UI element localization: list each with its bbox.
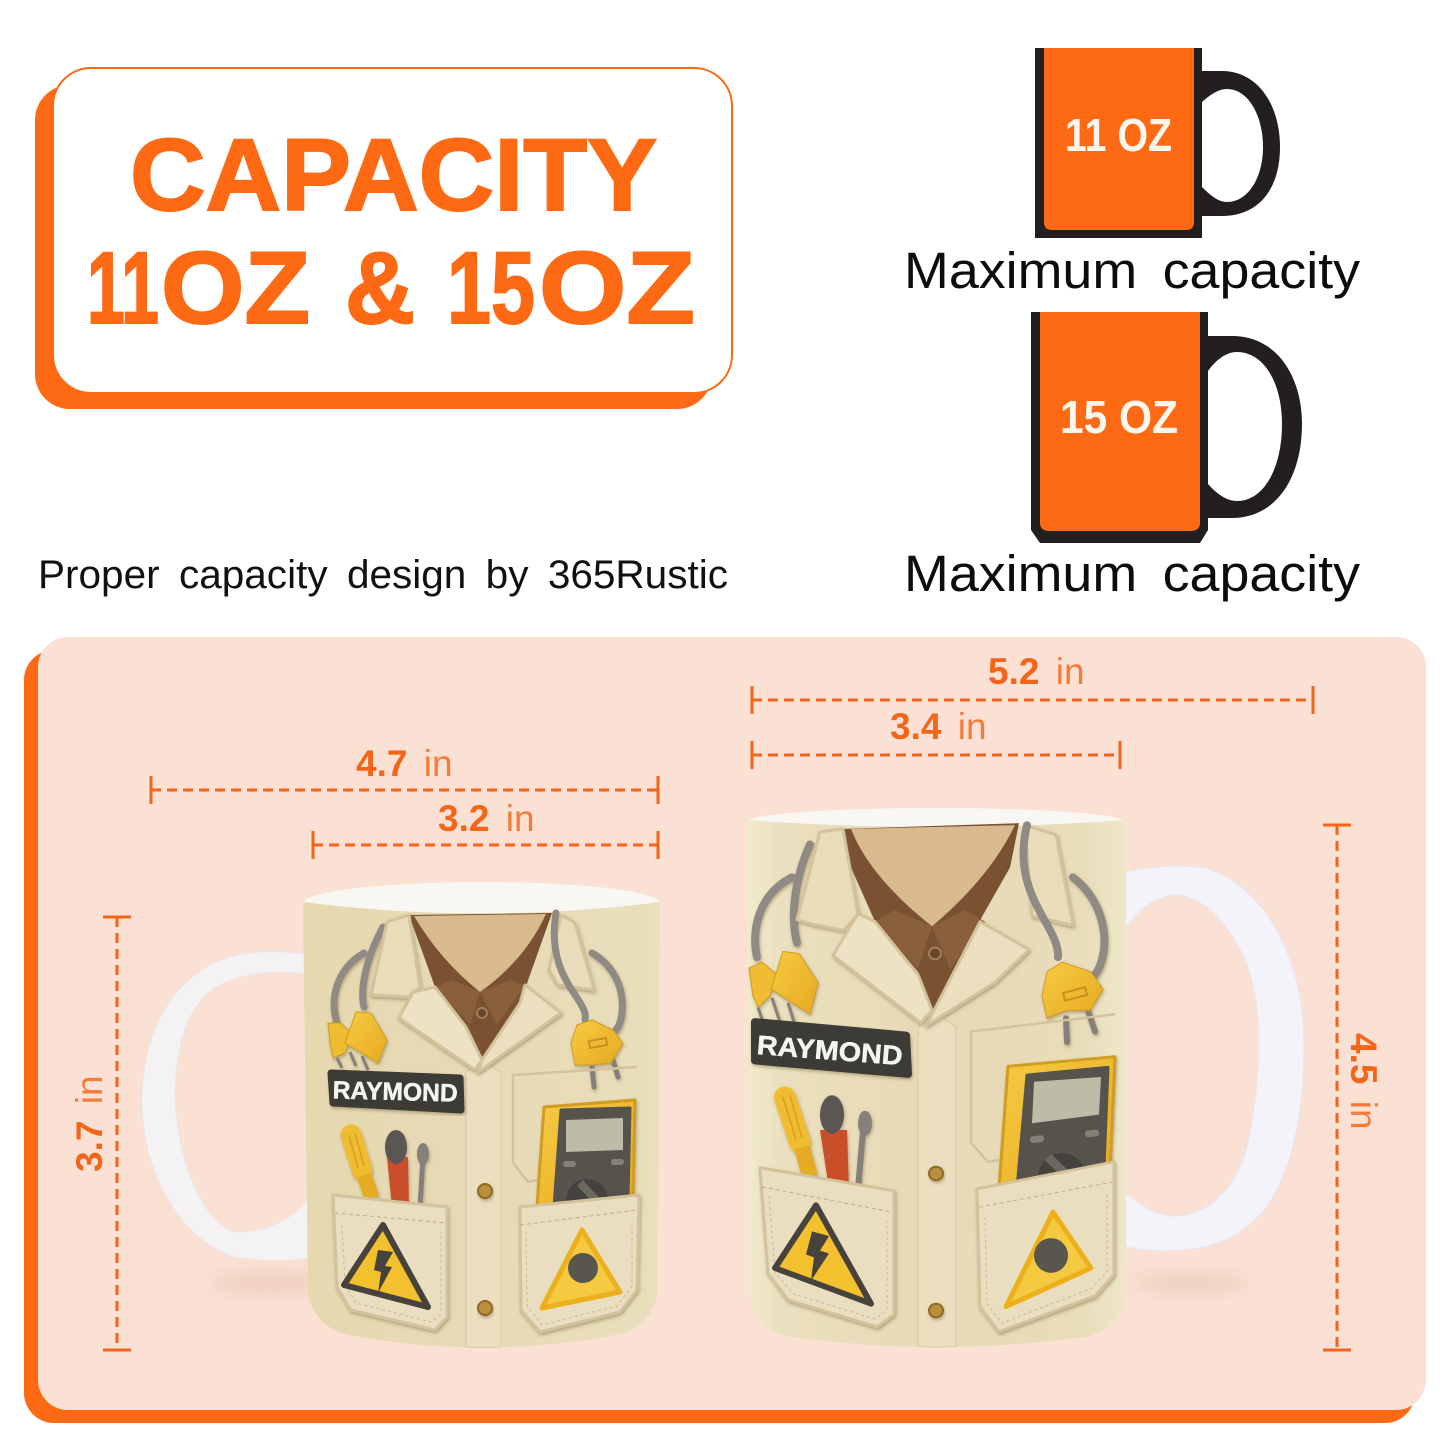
front cable xyxy=(1023,825,1058,957)
right pocket xyxy=(977,1162,1114,1332)
title line 1: CAPACITY xyxy=(130,118,657,232)
icon: 11 oz mug xyxy=(1035,48,1280,238)
dimension: 3.7 in: 3.7 in xyxy=(69,1075,110,1172)
card panel xyxy=(53,68,732,393)
body xyxy=(303,902,660,1348)
polo collar xyxy=(875,910,985,969)
dimension: 3.4 in: 3.4 in xyxy=(890,706,987,747)
collar button xyxy=(929,948,941,959)
placket xyxy=(918,1012,956,1347)
dimension: 3.2 in: 3.2 in xyxy=(438,798,535,839)
multimeter xyxy=(999,1057,1115,1200)
title line 2: & xyxy=(345,231,415,345)
label: maximum capacity 11 oz: Maximum capacity xyxy=(904,242,1361,299)
handle xyxy=(142,952,312,1261)
dimension: 5.2 in xyxy=(752,651,1313,714)
multimeter xyxy=(537,1100,635,1221)
title line 2: 15 xyxy=(447,231,535,345)
back cables xyxy=(334,927,622,1030)
yellow triangle xyxy=(1006,1212,1091,1307)
label 11 oz: 11 OZ xyxy=(1065,109,1172,161)
shadow xyxy=(210,1274,330,1292)
title line 2: OZ xyxy=(539,231,695,345)
name tag: RAYMOND xyxy=(756,1030,904,1071)
mug: 11 oz photo xyxy=(142,882,660,1348)
panel background xyxy=(38,637,1426,1410)
title card xyxy=(35,68,732,409)
left collar xyxy=(797,829,858,930)
polo collar xyxy=(435,980,525,1025)
dimension: 4.5 in: 4.5 in xyxy=(1343,1033,1384,1130)
neck xyxy=(414,914,546,992)
shirt xyxy=(409,913,552,1062)
tools xyxy=(783,1095,872,1189)
warning sign xyxy=(775,1205,871,1304)
right lapel xyxy=(478,985,561,1072)
bolt xyxy=(806,1231,829,1281)
handle xyxy=(1121,866,1304,1251)
left lapel xyxy=(833,914,932,1023)
left collar xyxy=(371,915,420,997)
placket xyxy=(466,1062,501,1348)
dial xyxy=(568,1253,598,1283)
yellow triangle xyxy=(542,1230,620,1308)
label 15 oz: 15 OZ xyxy=(1060,391,1178,443)
dimension: 3.2 in xyxy=(313,798,658,859)
right lapel xyxy=(926,922,1029,1026)
title line 2 xyxy=(87,231,695,345)
warning sign xyxy=(344,1225,428,1307)
icon: 15 oz mug xyxy=(1031,312,1302,543)
dial xyxy=(1034,1238,1068,1273)
dimension: 3.7 in xyxy=(69,917,131,1350)
title line 2: 11 xyxy=(87,231,159,345)
title line 2: OZ xyxy=(161,231,310,345)
rim xyxy=(747,808,1125,836)
body xyxy=(747,820,1126,1347)
dimension: 4.7 in: 4.7 in xyxy=(356,743,453,784)
collar button xyxy=(477,1008,487,1018)
dimension: 3.4 in xyxy=(752,706,1120,769)
label: maximum capacity 15 oz: Maximum capacity xyxy=(904,545,1361,602)
right plug xyxy=(1042,962,1103,1042)
dimension: 4.7 in xyxy=(151,743,658,804)
left plugs xyxy=(328,1012,387,1070)
mug: 15 oz photo xyxy=(747,808,1304,1347)
left plugs xyxy=(749,952,818,1025)
left lapel xyxy=(399,987,482,1070)
tools xyxy=(349,1130,429,1207)
front cable xyxy=(554,913,585,1020)
rim xyxy=(304,882,660,924)
left pocket xyxy=(760,1168,894,1327)
upper pocket xyxy=(513,1067,637,1182)
panel: dimensions xyxy=(24,637,1426,1423)
dimension: 5.2 in: 5.2 in xyxy=(988,651,1085,692)
neck xyxy=(851,825,1015,926)
bolt xyxy=(374,1250,393,1293)
shirt xyxy=(843,823,1019,1012)
shadow xyxy=(1130,1275,1250,1291)
back cables xyxy=(755,844,1104,975)
caption: Proper capacity design by 365Rustic xyxy=(38,553,728,597)
dimension: 4.5 in xyxy=(1323,825,1384,1350)
card shadow xyxy=(35,85,712,409)
right plug xyxy=(571,1020,623,1087)
shirt details xyxy=(749,823,1115,1347)
right collar xyxy=(1025,825,1073,925)
name tag: RAYMOND xyxy=(332,1076,458,1108)
left pocket xyxy=(333,1195,447,1330)
panel shadow xyxy=(24,650,1415,1423)
right collar xyxy=(549,915,594,990)
buttons xyxy=(478,1184,492,1315)
upper pocket xyxy=(971,1014,1115,1162)
buttons xyxy=(929,1167,943,1317)
right pocket xyxy=(520,1195,639,1332)
